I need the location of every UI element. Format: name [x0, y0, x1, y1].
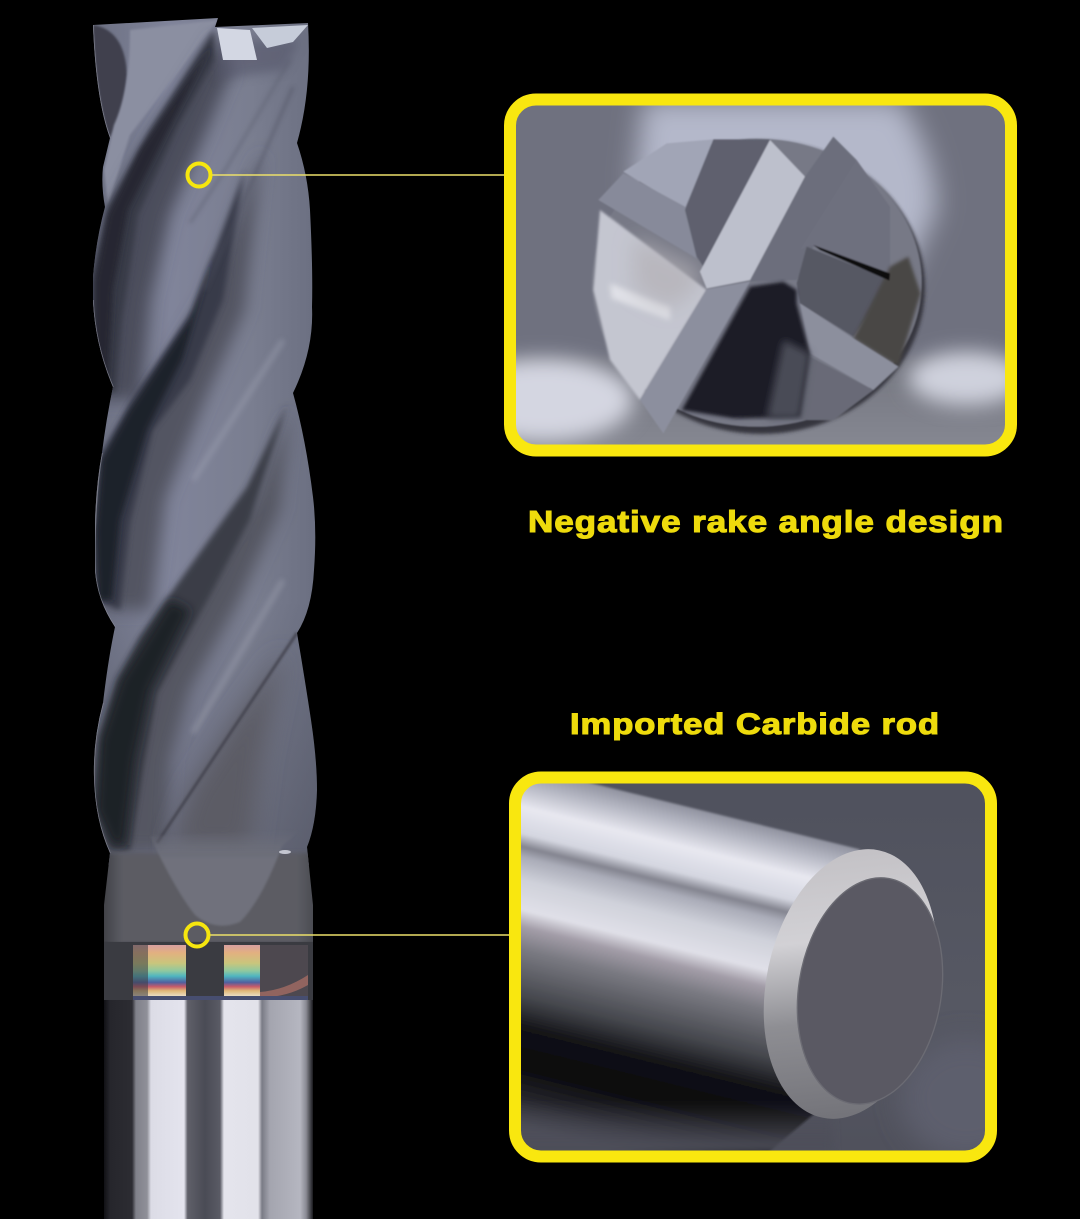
panel frame: [515, 778, 991, 1156]
lower right: [733, 357, 873, 420]
iridescent ring: [104, 942, 313, 1000]
main diagonal band: [750, 137, 857, 282]
heading: Imported Carbide rod: Imported Carbide rod: [570, 708, 940, 741]
end mill tool: [90, 15, 320, 1219]
callout: bottom leader line: [186, 924, 510, 946]
edge rim: [93, 25, 115, 853]
panel: carbide rod close-up: [509, 772, 997, 1162]
panel: negative rake angle close-up: [504, 94, 1017, 456]
panel frame: [510, 100, 1011, 450]
icon: rod: [521, 784, 944, 1150]
icon: cutter face: [592, 137, 925, 434]
heading: Negative rake angle design: Negative rake angle design: [528, 504, 1004, 539]
tool flutes: [90, 20, 297, 850]
dark pocket: [682, 282, 810, 418]
top-left land: [623, 139, 713, 208]
neck: [104, 836, 313, 942]
callout: top leader line: [188, 164, 505, 186]
right upper face: [816, 160, 889, 272]
shaft behind cutter: [633, 100, 937, 290]
tool tip facets: [217, 25, 308, 80]
left blade: [593, 210, 707, 400]
shank: [104, 1000, 313, 1219]
